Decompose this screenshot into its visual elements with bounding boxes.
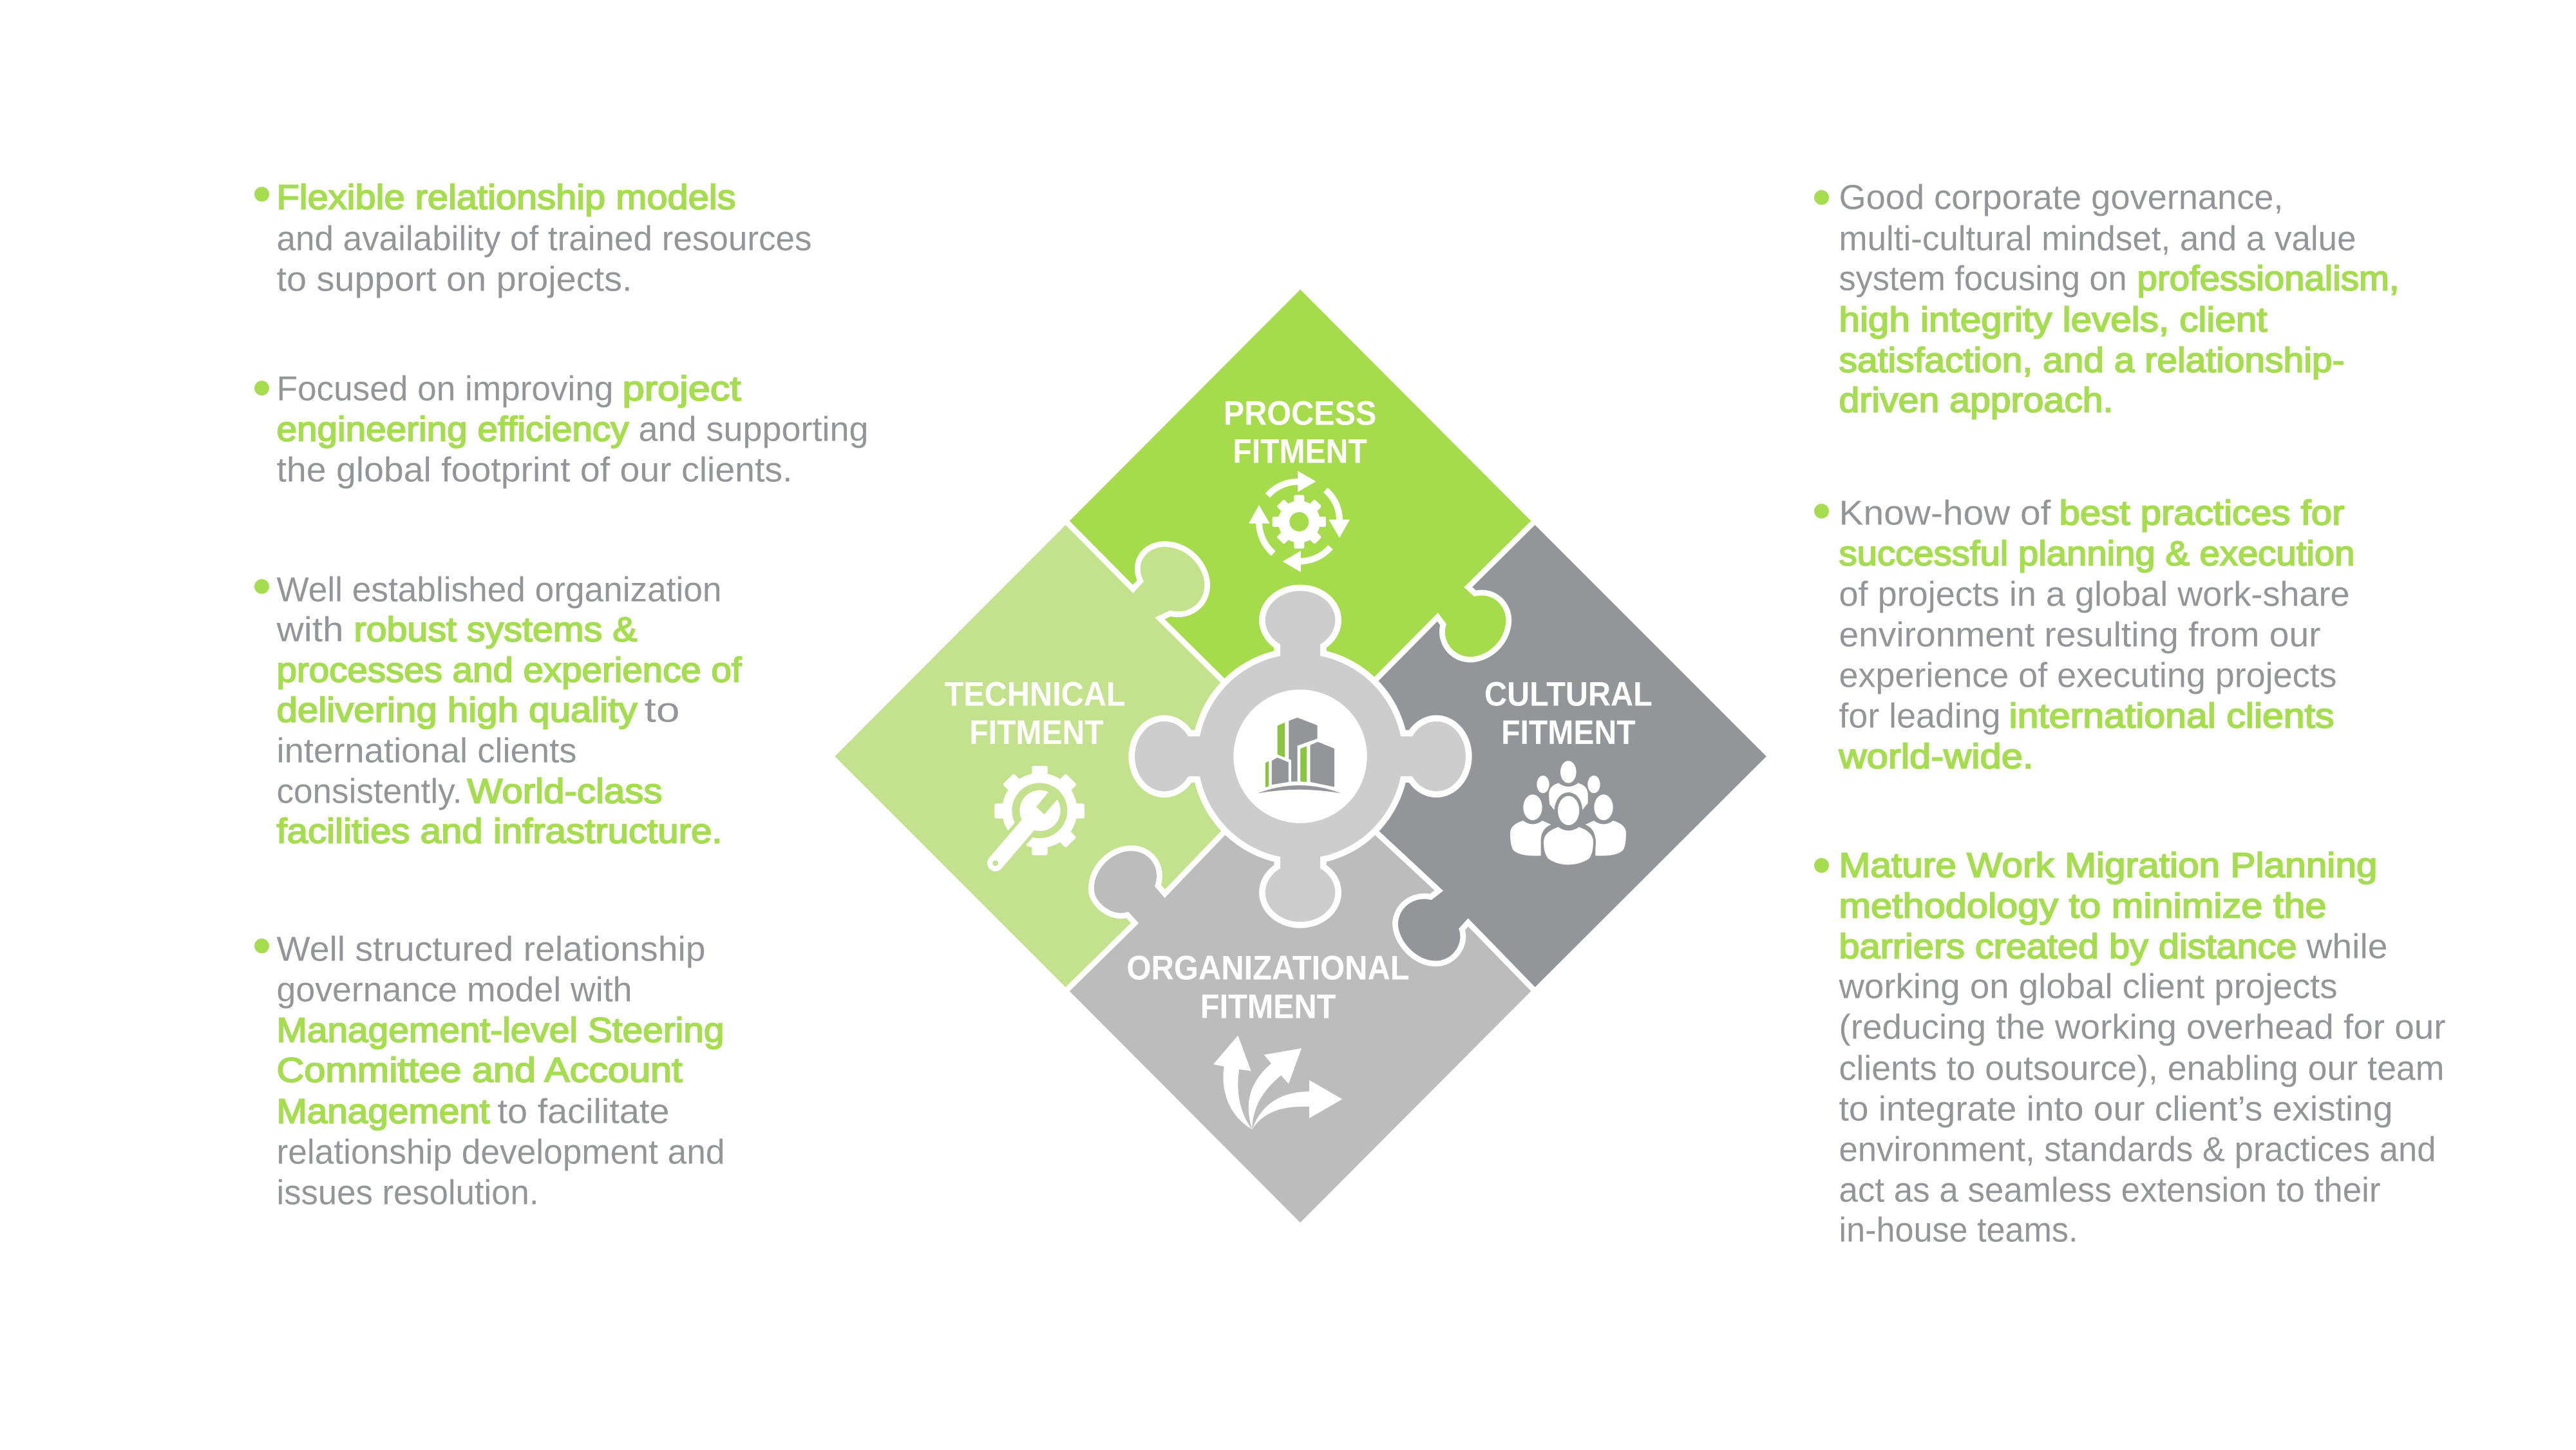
text block: corporate governance xyxy=(1814,178,2400,420)
text block: work migration planning xyxy=(1814,846,2446,1250)
text block: flexible relationship models xyxy=(254,178,811,299)
text block: robust systems and facilities: delivering high quality xyxy=(277,691,638,729)
text block: relationship governance model: Well structured relationship xyxy=(277,930,706,969)
heading: technical fitment: FITMENT xyxy=(969,714,1104,752)
text block: corporate governance: driven approach. xyxy=(1839,381,2114,420)
text block: project engineering efficiency: engineering efficiency xyxy=(277,410,629,448)
text block: corporate governance: multi-cultural mindset, and a value xyxy=(1839,219,2356,258)
text block: project engineering efficiency: and supporting xyxy=(639,410,868,448)
icon: process gear with cycle arrows xyxy=(1249,471,1350,572)
heading: process fitment xyxy=(1224,394,1376,471)
text block: work migration planning: act as a seamless extension to their xyxy=(1839,1171,2381,1210)
heading: cultural fitment: FITMENT xyxy=(1501,714,1636,752)
text block: best practices know-how: of projects in a global work-share xyxy=(1839,575,2349,613)
text block: project engineering efficiency: the global footprint of our clients. xyxy=(277,451,792,490)
text block: work migration planning: clients to outsource), enabling our team xyxy=(1839,1049,2445,1087)
heading: cultural fitment: CULTURAL xyxy=(1484,676,1653,714)
text block: work migration planning: environment, standards & practices and xyxy=(1839,1130,2436,1169)
heading: organizational fitment: FITMENT xyxy=(1200,987,1336,1025)
heading: technical fitment: TECHNICAL xyxy=(944,676,1126,714)
text block: relationship governance model: relationship development and xyxy=(277,1132,725,1171)
text block: best practices know-how: for leading xyxy=(1839,697,2000,736)
panel: process fitment piece xyxy=(1066,285,1535,756)
text block: relationship governance model xyxy=(254,930,725,1212)
heading: process fitment: PROCESS xyxy=(1224,394,1376,432)
panel: cultural fitment piece xyxy=(1300,521,1770,991)
text block: robust systems and facilities: to xyxy=(644,691,680,729)
text block: relationship governance model: issues resolution. xyxy=(277,1174,538,1212)
text block: best practices know-how: experience of executing projects xyxy=(1839,656,2336,694)
text block: work migration planning: barriers created by distance xyxy=(1839,928,2297,966)
text block: project engineering efficiency: project xyxy=(622,370,741,408)
text block: robust systems and facilities: processes and experience of xyxy=(277,651,743,689)
icon: technical gear and wrench xyxy=(992,766,1084,866)
text block: corporate governance: high integrity levels, client xyxy=(1839,300,2267,339)
text block: flexible relationship models: to support on projects. xyxy=(277,260,632,299)
text block: best practices know-how: international clients xyxy=(2009,697,2334,736)
icon: organizational growth arrows xyxy=(1213,1035,1342,1129)
text block: robust systems and facilities: international clients xyxy=(277,732,577,770)
text block: relationship governance model: Committee and Account xyxy=(277,1051,683,1090)
text block: work migration planning: methodology to minimize the xyxy=(1839,886,2326,925)
text block: robust systems and facilities: robust systems & xyxy=(354,611,638,649)
panel: technical fitment piece xyxy=(831,521,1300,991)
heading: process fitment: FITMENT xyxy=(1233,433,1367,471)
text block: robust systems and facilities: facilities and infrastructure. xyxy=(277,812,723,850)
icon: central buildings logo xyxy=(1258,718,1341,794)
text block: best practices know-how: world-wide. xyxy=(1838,737,2034,776)
heading: technical fitment xyxy=(944,676,1126,752)
text block: best practices know-how xyxy=(1814,493,2354,776)
text block: robust systems and facilities xyxy=(254,571,743,850)
text block: best practices know-how: successful planning & execution xyxy=(1839,535,2354,573)
heading: cultural fitment xyxy=(1484,676,1653,752)
text block: relationship governance model: to facilitate xyxy=(497,1092,670,1131)
text block: corporate governance: Good corporate governance, xyxy=(1839,178,2284,216)
text block: best practices know-how: Know-how of xyxy=(1839,493,2052,532)
text block: robust systems and facilities: World-class xyxy=(468,772,662,810)
puzzle diagram xyxy=(831,285,1770,1226)
text block: work migration planning: in-house teams. xyxy=(1839,1211,2078,1250)
text block: work migration planning: (reducing the working overhead for our xyxy=(1839,1007,2446,1046)
text block: best practices know-how: best practices for xyxy=(2060,493,2345,532)
text block: robust systems and facilities: with xyxy=(276,611,344,649)
heading: organizational fitment xyxy=(1127,949,1410,1025)
text block: work migration planning: Mature Work Migration Planning xyxy=(1839,846,2378,885)
text block: flexible relationship models: and availability of trained resources xyxy=(277,219,811,258)
icon: cultural people group xyxy=(1510,761,1626,866)
heading: organizational fitment: ORGANIZATIONAL xyxy=(1127,949,1410,987)
text block: corporate governance: professionalism, xyxy=(2137,259,2400,298)
central gear hub xyxy=(1135,591,1466,922)
text block: work migration planning: working on global client projects xyxy=(1838,968,2338,1006)
text block: work migration planning: to integrate into our client’s existing xyxy=(1839,1090,2393,1129)
text block: robust systems and facilities: Well established organization xyxy=(277,571,721,609)
text block: relationship governance model: Management-level Steering xyxy=(277,1011,724,1050)
text block: robust systems and facilities: consistently. xyxy=(277,772,462,810)
text block: flexible relationship models: Flexible relationship models xyxy=(277,178,735,216)
panel: organizational fitment piece xyxy=(1066,756,1535,1226)
text block: relationship governance model: Management xyxy=(277,1092,489,1131)
text block: work migration planning: while xyxy=(2306,928,2388,966)
text block: best practices know-how: environment resulting from our xyxy=(1839,616,2321,654)
text block: project engineering efficiency xyxy=(254,370,868,490)
text block: corporate governance: satisfaction, and a relationship- xyxy=(1839,341,2344,380)
text block: relationship governance model: governance model with xyxy=(277,970,632,1009)
text block: corporate governance: system focusing on xyxy=(1839,259,2126,298)
text block: project engineering efficiency: Focused on improving xyxy=(277,370,613,408)
